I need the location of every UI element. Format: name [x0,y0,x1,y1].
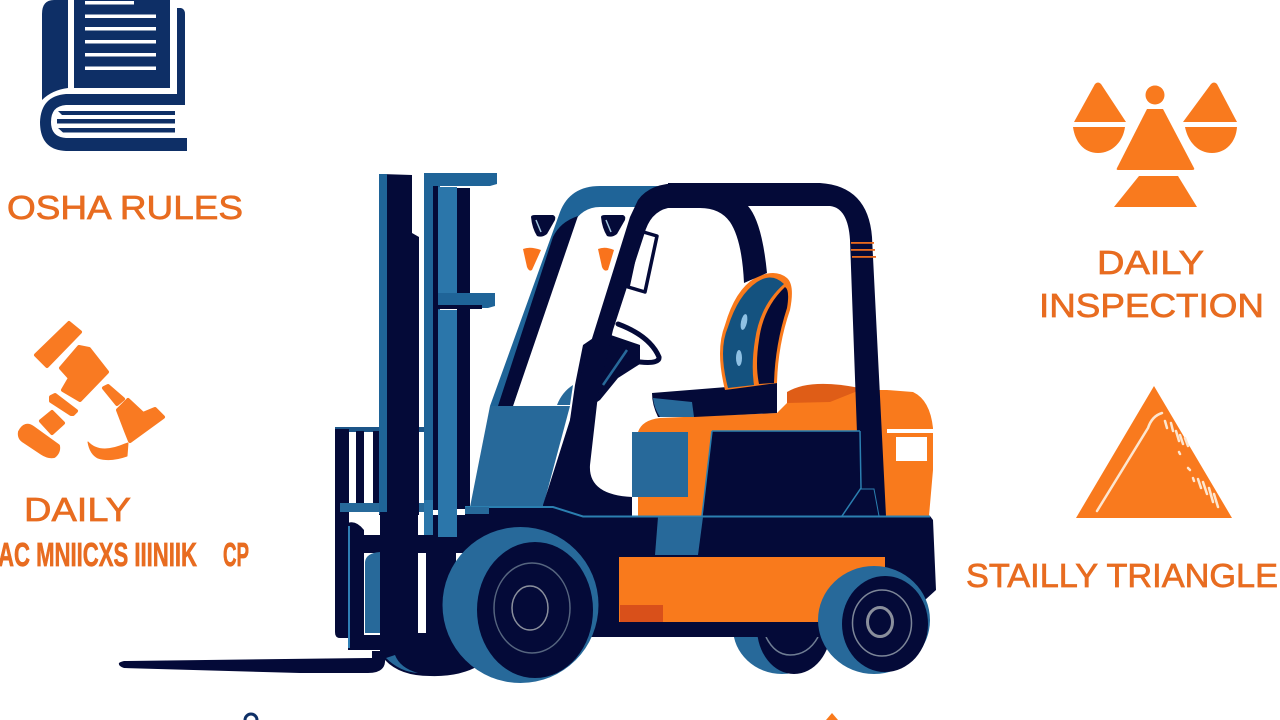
side mirrors [523,215,625,271]
seat base [652,383,777,417]
steering column [570,324,659,420]
rear-view mirror [628,231,657,292]
heading: OSHA rules: OSHA RULES [7,189,243,226]
heading: daily inspection [1039,244,1264,324]
seat back [720,273,792,390]
icon: stability triangle [1076,386,1232,518]
blue storage box [632,432,688,497]
heading: daily inspection: DAILY [1097,244,1204,281]
orange side panel [619,557,885,622]
front wheel [442,527,598,683]
heading: daily inspection: INSPECTION [1039,287,1264,324]
illustration: forklift [119,173,936,683]
fork [119,651,385,673]
text: garbled caption: AC MNIICXS IIINIIK [0,536,197,573]
text: garbled caption: CP [223,536,249,573]
load backrest [335,427,426,650]
rear counterweight top [638,384,933,516]
overhead guard: outer blue frame [490,186,680,406]
icon: cropped triangle at bottom edge [826,713,838,720]
heading: daily (left): DAILY [24,491,131,528]
guard stripes [851,242,876,258]
chassis [460,507,936,640]
rear wheel [818,566,930,674]
roll cage [668,183,886,516]
icon: scales of balance [1073,82,1237,207]
far-side front wheel [385,640,480,676]
icon: rule book [40,0,187,151]
mast [348,173,497,655]
icon: cropped ring at bottom edge [245,714,257,720]
front panel [470,406,570,507]
engine panel [702,431,879,516]
heading: stability triangle: STAILLY TRIANGLE [966,557,1278,594]
icon: gavel [20,323,163,460]
front cab pillar and lower cowl [543,183,680,518]
far-side rear wheel [733,582,831,674]
